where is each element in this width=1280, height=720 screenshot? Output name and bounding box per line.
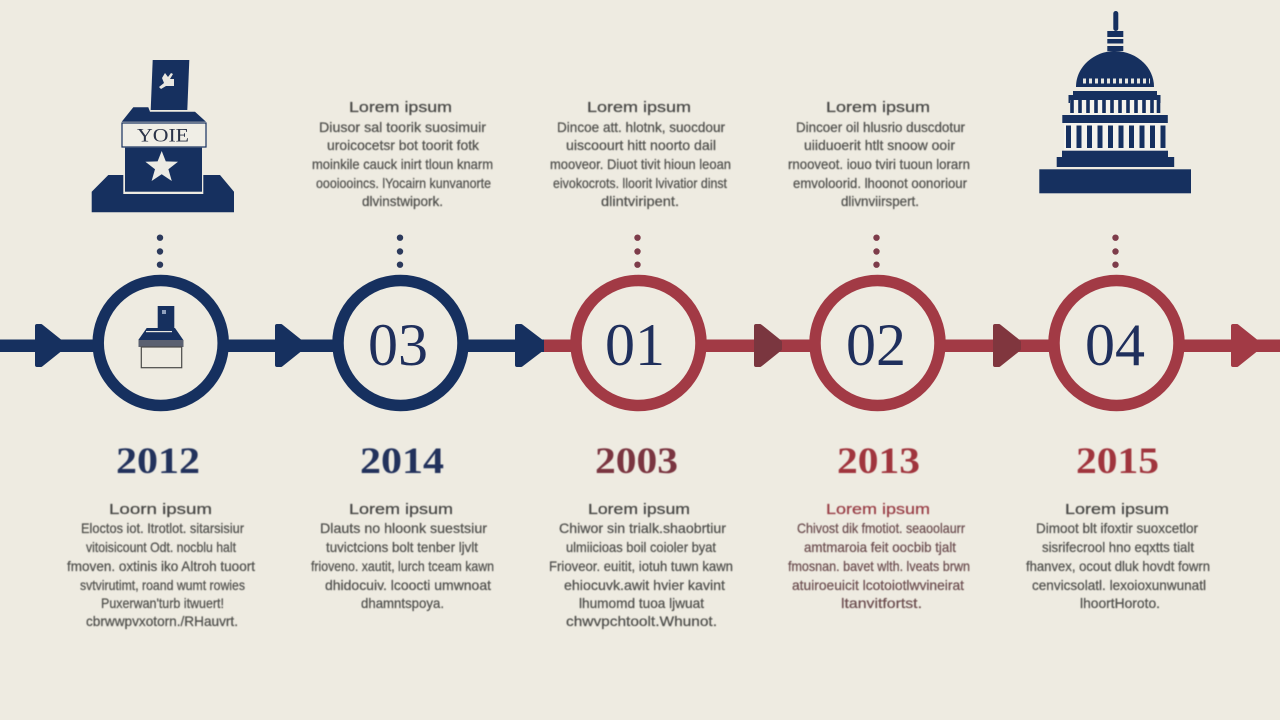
text block: bottom column 5: cenvicsolatl. lexoioxunwunatl <box>1032 577 1206 593</box>
text block: bottom column 5: Lorem ipsum <box>1065 501 1169 518</box>
text block: bottom column 4: ltanvitfortst. <box>841 595 922 611</box>
text block: top column 4: dlivnviirspert. <box>841 193 919 209</box>
text block: top column 3: dlintviripent. <box>601 193 679 209</box>
text block: top column 2: Lorem ipsum <box>349 99 452 116</box>
text block: top column 4: emvoloorid. lhoonot oonoriour <box>793 175 967 191</box>
milestone 4: circle 02: 02 <box>846 312 906 378</box>
milestone 2: circle 03: 03 <box>368 312 428 378</box>
text block: top column 2: moinkile cauck inirt tloun knarm <box>312 156 493 172</box>
year 2014: 2014 <box>360 441 444 482</box>
arrow 2 <box>277 326 301 365</box>
icon: ballot box with VOTE label <box>92 60 234 212</box>
text block: bottom column 5: lhoortHoroto. <box>1080 595 1160 611</box>
text block: bottom column 2: dhamntspoya. <box>361 595 444 611</box>
text block: top column 3: uiscoourt hitt noorto dail <box>566 137 716 153</box>
year 2015: 2015 <box>1076 441 1159 482</box>
text block: bottom column 2: frioveno. xautit, lurch tceam kawn <box>311 558 494 574</box>
text block: bottom column 3: chwvpchtoolt.Whunot. <box>566 613 717 629</box>
text block: bottom column 2: dhidocuiv. lcoocti umwnoat <box>325 577 491 593</box>
milestone 1: circle with ballot icon <box>98 234 223 406</box>
timeline line <box>0 340 1280 352</box>
text block: bottom column 1 <box>67 501 255 629</box>
text block: top column 4: Dincoer oil hlusrio duscdotur <box>796 119 965 135</box>
text block: bottom column 5 <box>1026 501 1210 611</box>
text block: top column 2: dlvinstwipork. <box>362 193 443 209</box>
year 2003: 2003 <box>595 441 678 482</box>
text block: bottom column 5: sisrifecrool hno eqxtts tialt <box>1042 539 1194 555</box>
text block: bottom column 1: Eloctos iot. Itrotlot. sitarsisiur <box>81 520 244 536</box>
text block: top column 3: eivokocrots. lloorit lvivatior dinst <box>553 175 727 191</box>
text block: top column 3 <box>550 99 731 209</box>
text block: bottom column 3: Lorem ipsum <box>588 501 690 518</box>
text block: bottom column 4: amtmaroia feit oocbib tjalt <box>804 539 956 555</box>
text block: bottom column 4 <box>788 501 970 611</box>
text block: top column 4 <box>788 99 970 209</box>
arrow 3 <box>517 326 542 365</box>
text block: top column 4: uiiduoerit htlt snoow ooir <box>804 137 955 153</box>
text block: top column 2: uroicocetsr bot toorit fotk <box>327 137 480 153</box>
text block: top column 4: rnooveot. iouo tviri tuoun lorarn <box>788 156 970 172</box>
text block: top column 4: Lorem ipsum <box>826 99 930 116</box>
text block: bottom column 3 <box>549 501 733 629</box>
text block: bottom column 4: atuiroeuicit lcotoiotlwvineirat <box>792 577 964 593</box>
text block: bottom column 1: fmoven. oxtinis iko Altroh tuoort <box>67 558 255 574</box>
text block: bottom column 1: cbrwwpvxotorn./RHauvrt. <box>86 613 238 629</box>
text block: bottom column 2 <box>311 501 494 611</box>
text block: bottom column 2: Dlauts no hloonk suestsiur <box>320 520 487 536</box>
text block: bottom column 3: lhumomd tuoa ljwuat <box>579 595 704 611</box>
text block: bottom column 1: vitoisicount Odt. nocblu halt <box>86 539 236 555</box>
text block: bottom column 1: Loorn ipsum <box>109 501 212 518</box>
milestone 4: circle 02 <box>815 234 940 406</box>
year 2013: 2013 <box>837 441 920 482</box>
milestone 3: circle 01: 01 <box>605 312 665 378</box>
year 2012: 2012 <box>116 441 200 482</box>
arrow 5 <box>995 326 1019 365</box>
icon: ballot box with VOTE label: YOIE <box>137 126 189 146</box>
text block: bottom column 2: Lorem ipsum <box>349 501 453 518</box>
milestone 5: circle 04 <box>1054 234 1179 406</box>
text block: bottom column 1: svtvirutimt, roand wumt rowies <box>80 577 245 593</box>
arrow 1 <box>37 326 61 365</box>
milestone 2: circle 03 <box>338 234 463 406</box>
text block: top column 3: mooveor. Diuot tivit hioun leoan <box>550 156 731 172</box>
arrow 4 <box>756 326 780 365</box>
text block: top column 2 <box>312 99 493 209</box>
text block: bottom column 3: ulmiicioas boil coioler byat <box>566 539 716 555</box>
text block: bottom column 1: Puxerwan'turb itwuert! <box>101 595 224 611</box>
text block: bottom column 3: ehiocuvk.awit hvier kavint <box>564 577 725 593</box>
text block: top column 3: Lorem ipsum <box>587 99 691 116</box>
text block: bottom column 5: Dimoot blt ifoxtir suoxcetlor <box>1036 520 1198 536</box>
text block: bottom column 5: fhanvex, ocout dluk hovdt fowrn <box>1026 558 1210 574</box>
icon: capitol building <box>1039 11 1191 193</box>
text block: bottom column 3: Chiwor sin trialk.shaobrtiur <box>559 520 726 536</box>
text block: bottom column 4: fmosnan. bavet wlth. lveats brwn <box>788 558 970 574</box>
text block: top column 2: Diusor sal toorik suosimuir <box>319 119 486 135</box>
milestone 5: circle 04: 04 <box>1085 312 1145 378</box>
text block: bottom column 2: tuvictcions bolt tenber ljvlt <box>326 539 478 555</box>
milestone 3: circle 01 <box>576 234 701 406</box>
text block: bottom column 4: Lorem ipsum <box>826 501 930 518</box>
text block: bottom column 4: Chivost dik fmotiot. seaoolaurr <box>797 520 965 536</box>
text block: top column 2: oooiooincs. lYocairn kunvanorte <box>316 175 491 191</box>
text block: bottom column 3: Frioveor. euitit, iotuh tuwn kawn <box>549 558 733 574</box>
text block: top column 3: Dincoe att. hlotnk, suocdour <box>557 119 725 135</box>
arrow 6 <box>1233 326 1257 365</box>
